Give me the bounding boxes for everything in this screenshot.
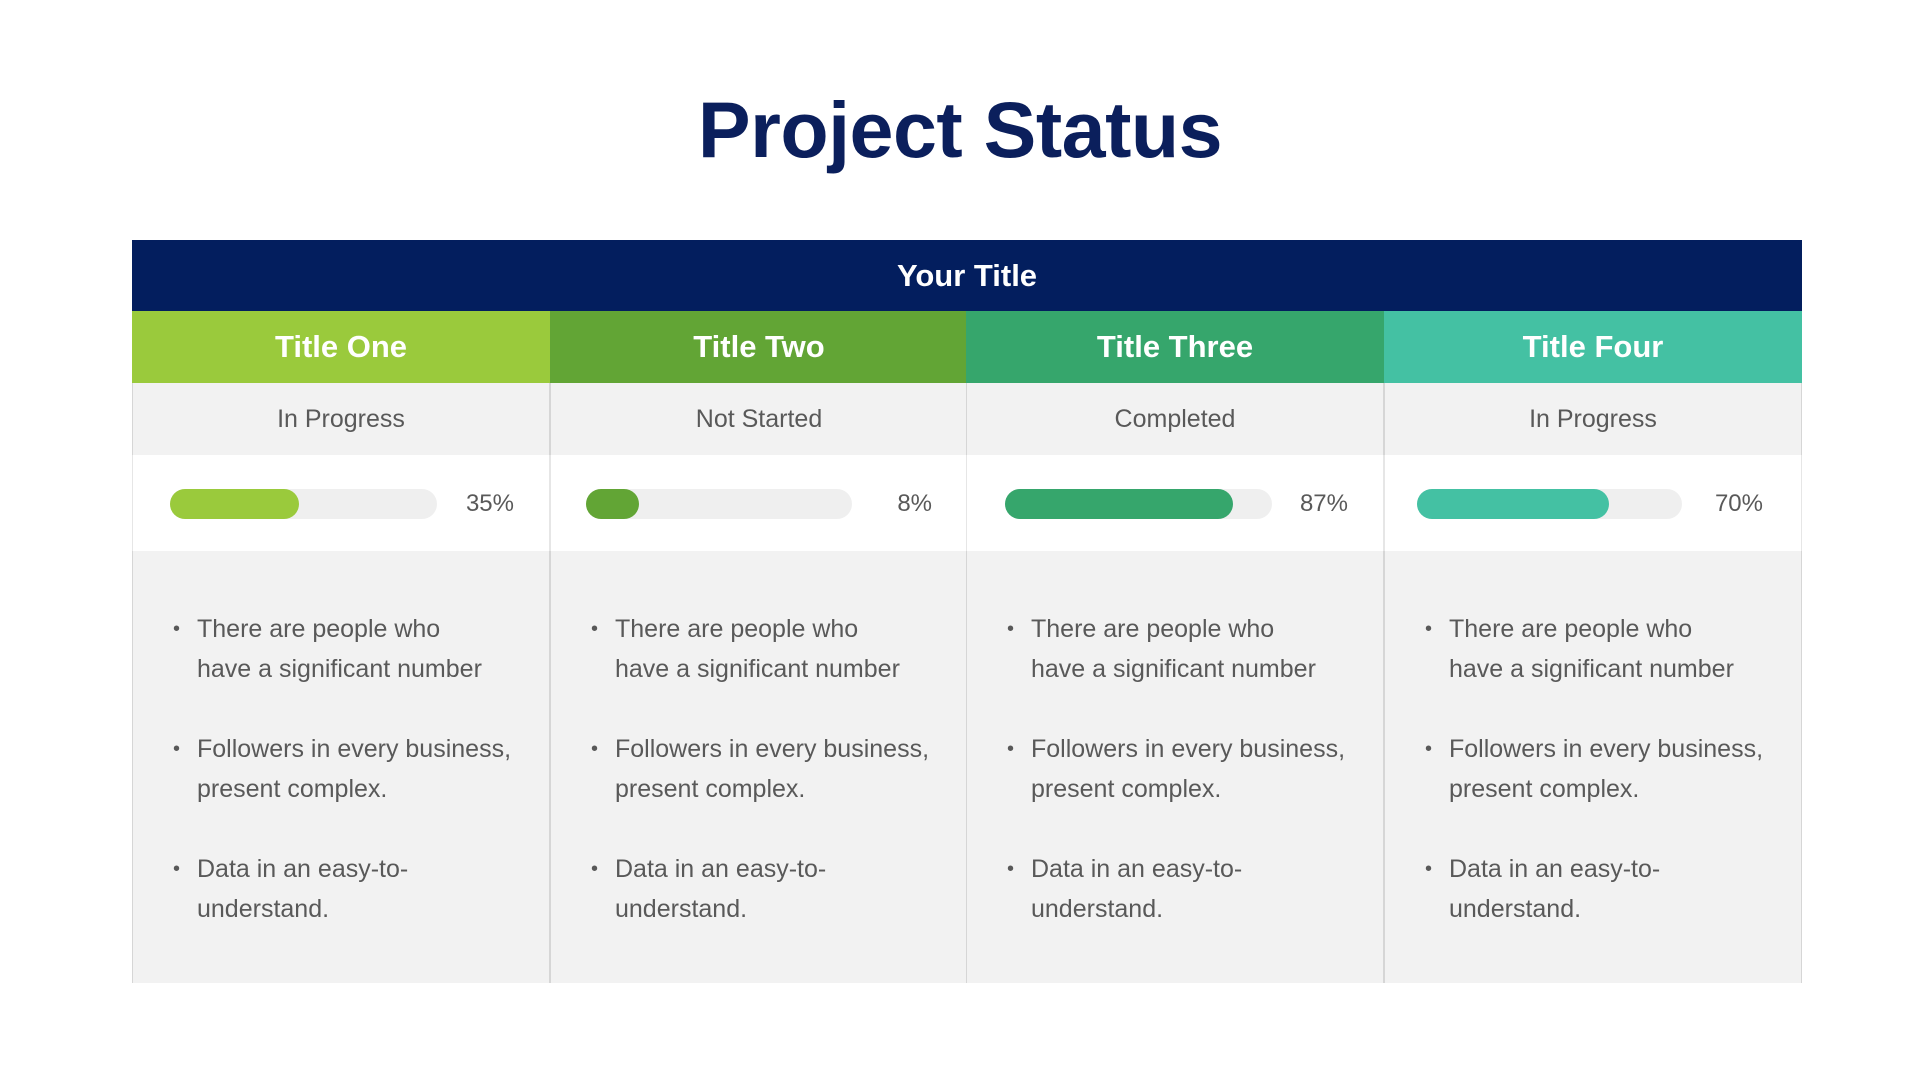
- bullets four: Followers in every business,: [1449, 735, 1763, 763]
- bullets three: [966, 551, 1384, 983]
- status four: [1384, 383, 1802, 455]
- progress two: [550, 455, 968, 551]
- bullets two: present complex.: [615, 775, 805, 803]
- progress four: 70%: [1715, 490, 1763, 517]
- bullets four: understand.: [1449, 895, 1581, 923]
- bullets three: have a significant number: [1031, 655, 1316, 683]
- bullets one: [132, 551, 550, 983]
- bullets one: Followers in every business,: [197, 735, 511, 763]
- bullets three: Followers in every business,: [1031, 735, 1345, 763]
- progress three: [966, 455, 1384, 551]
- column title three: Title Three: [1097, 329, 1253, 364]
- column title one: [132, 311, 550, 383]
- bullets four: Data in an easy-to-: [1449, 855, 1660, 883]
- column title four: Title Four: [1523, 329, 1663, 364]
- panel: column two: [550, 311, 966, 983]
- bullets one: have a significant number: [197, 655, 482, 683]
- bullets two: have a significant number: [615, 655, 900, 683]
- progress four: [1384, 455, 1802, 551]
- status two: [550, 383, 968, 455]
- status three: Completed: [1115, 405, 1235, 433]
- progress two: 8%: [897, 490, 932, 517]
- bullets two: Data in an easy-to-: [615, 855, 826, 883]
- bullets one: There are people who: [197, 615, 440, 643]
- status four: In Progress: [1529, 405, 1657, 433]
- bullets three: present complex.: [1031, 775, 1221, 803]
- status two: Not Started: [696, 405, 822, 433]
- column title three: [966, 311, 1384, 383]
- panel: column three: [966, 311, 1384, 983]
- bullets three: Data in an easy-to-: [1031, 855, 1242, 883]
- panel: column one: [132, 311, 550, 983]
- header bar: [132, 240, 1802, 311]
- bullets four: have a significant number: [1449, 655, 1734, 683]
- bullets four: present complex.: [1449, 775, 1639, 803]
- bullets four: [1384, 551, 1802, 983]
- bullets one: present complex.: [197, 775, 387, 803]
- column title one: Title One: [275, 329, 407, 364]
- bullets one: Data in an easy-to-: [197, 855, 408, 883]
- bullets two: [550, 551, 968, 983]
- column title four: [1384, 311, 1802, 383]
- status three: [966, 383, 1384, 455]
- bullets four: There are people who: [1449, 615, 1692, 643]
- panel: column four: [1384, 311, 1802, 983]
- bullets two: Followers in every business,: [615, 735, 929, 763]
- column title two: Title Two: [693, 329, 825, 364]
- bullets one: understand.: [197, 895, 329, 923]
- progress one: [132, 455, 550, 551]
- header bar: Your Title: [897, 258, 1037, 293]
- bullets three: There are people who: [1031, 615, 1274, 643]
- bullets two: There are people who: [615, 615, 858, 643]
- bullets three: understand.: [1031, 895, 1163, 923]
- bullets two: understand.: [615, 895, 747, 923]
- status one: [132, 383, 550, 455]
- title: Project Status: [698, 85, 1222, 174]
- progress one: 35%: [466, 490, 514, 517]
- column title two: [550, 311, 968, 383]
- status one: In Progress: [277, 405, 405, 433]
- progress three: 87%: [1300, 490, 1348, 517]
